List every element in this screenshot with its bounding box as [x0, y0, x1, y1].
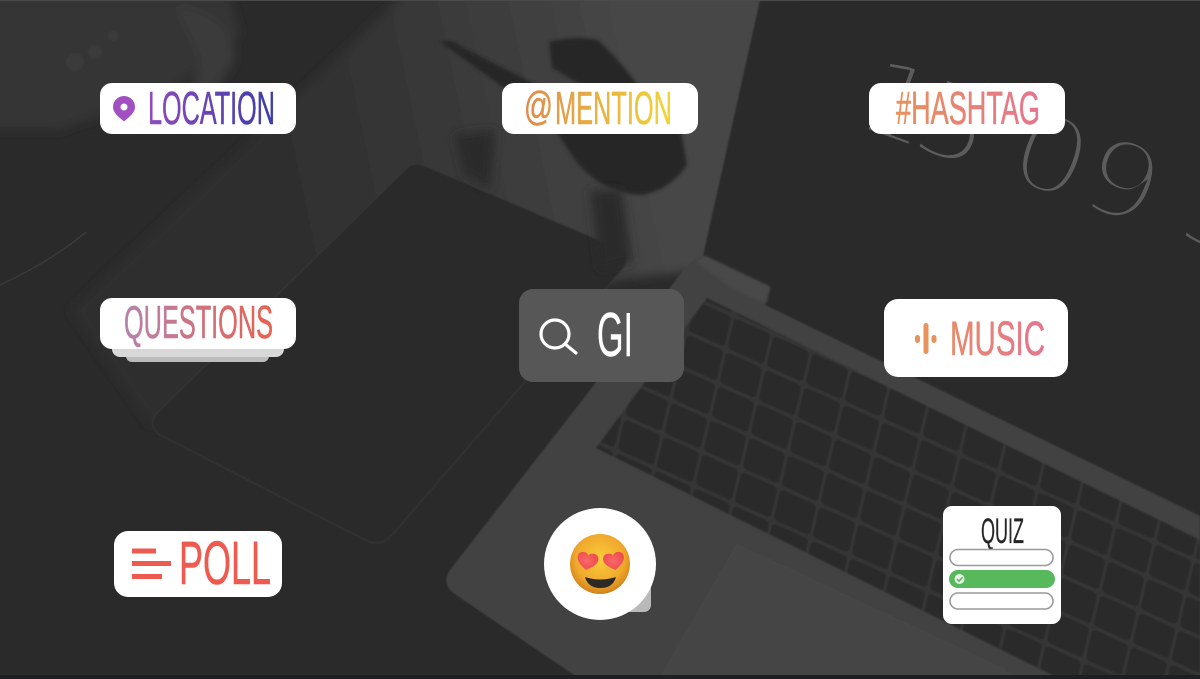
- bottom edge strip: [0, 675, 1200, 679]
- sticker: quiz: [943, 506, 1061, 624]
- icon: magnifying glass: [541, 320, 576, 353]
- quiz option: empty: [950, 550, 1053, 566]
- sunglasses shadows: [455, 130, 632, 270]
- laptop screen: [703, 0, 1200, 516]
- icon: location pin: [113, 96, 135, 122]
- sunglasses temple: [440, 41, 582, 108]
- sunglasses: [440, 38, 687, 195]
- label: GI: GI: [597, 301, 633, 370]
- label: LOCATION: LOCATION: [148, 82, 275, 134]
- quiz option: correct: [949, 570, 1055, 588]
- label: POLL: POLL: [179, 529, 271, 597]
- sticker: questions: [100, 296, 296, 362]
- label: #HASHTAG: #HASHTAG: [896, 82, 1040, 134]
- laptop clock digits on screen: 5: [897, 52, 1011, 196]
- tablet: [152, 164, 627, 543]
- camera silhouette: [0, 0, 240, 130]
- sticker: mention: [502, 82, 698, 134]
- camera strap line: [0, 232, 86, 285]
- trackpad: [660, 545, 1012, 679]
- sticker: location: [100, 82, 296, 134]
- icon: poll bars: [132, 548, 171, 579]
- label: QUESTIONS: QUESTIONS: [124, 296, 273, 348]
- label: QUIZ: QUIZ: [981, 512, 1024, 551]
- camera knobs: [66, 31, 118, 71]
- icon: music waveform: [915, 323, 936, 354]
- label: @MENTION: MENTION: [555, 82, 672, 134]
- sticker: poll: [114, 529, 282, 597]
- laptop clock digits on screen: 9: [1066, 110, 1180, 254]
- laptop clock digits on screen: 1: [841, 32, 955, 176]
- icon: heart-eyes emoji: [570, 534, 630, 594]
- sticker: music: [884, 299, 1068, 377]
- label: MUSIC: MUSIC: [950, 313, 1045, 366]
- sticker: hashtag: [869, 82, 1065, 134]
- sticker: gif search: [519, 289, 684, 382]
- sticker: emoji slider: [544, 508, 656, 620]
- laptop body: [446, 256, 1200, 679]
- laptop clock digits on screen: [841, 32, 1200, 285]
- laptop hinge: [696, 256, 770, 303]
- quiz option: empty: [950, 593, 1053, 609]
- sunglasses far frame: [549, 38, 652, 105]
- desk surface: [70, 0, 800, 425]
- sunglasses lens: [555, 125, 687, 195]
- keyboard: [596, 298, 1200, 679]
- label: @MENTION: @: [524, 83, 553, 129]
- laptop clock digits on screen: 0: [994, 84, 1108, 228]
